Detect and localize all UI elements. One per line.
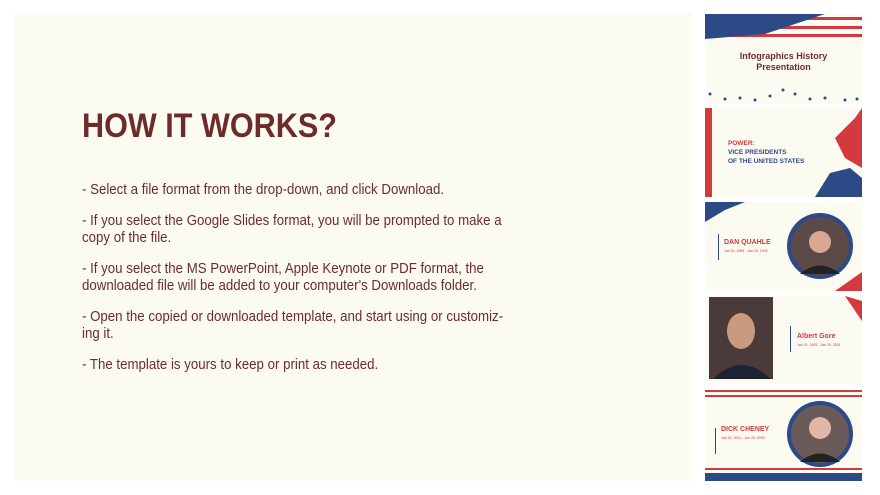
thumbnail title: Infographics History bbox=[740, 51, 827, 61]
name: DAN QUAHLE bbox=[724, 239, 771, 246]
instructions text: - If you select the Google Slides format, you will be prompted to make a copy of the file. bbox=[82, 213, 502, 246]
thumbnail 1: title slide bbox=[705, 14, 862, 104]
instructions text: - If you select the MS PowerPoint, Apple Keynote or PDF format, the downloaded file will be added to your computer's Downloads folder. bbox=[82, 261, 484, 294]
thumbnail 2 text: POWER: bbox=[728, 140, 755, 147]
instructions text: - Select a file format from the drop-down, and click Download. bbox=[82, 182, 444, 198]
thumbnail 5: Dick Cheney: DICK CHENEY bbox=[721, 426, 769, 433]
thumbnail 4: Albert Gore: Jan 20, 1993 - Jan 20, 2001 bbox=[797, 343, 841, 347]
main panel bbox=[15, 13, 691, 481]
thumbnail 5: Dick Cheney: Jan 20, 2001 - Jan 20, 2009 bbox=[721, 436, 765, 440]
title: HOW IT WORKS? bbox=[82, 107, 337, 145]
thumbnail 2: vice presidents bbox=[705, 108, 862, 197]
instructions text bbox=[82, 182, 503, 373]
instructions text: - Open the copied or downloaded template, and start using or customiz-ing it. bbox=[82, 309, 503, 342]
thumbnail 4: Albert Gore: Albert Gore bbox=[797, 333, 836, 340]
thumbnail title bbox=[740, 51, 828, 72]
thumbnail 2 text bbox=[728, 140, 804, 165]
thumbnail 2 text: OF THE UNITED STATES bbox=[728, 158, 804, 165]
thumbnail 5: Dick Cheney bbox=[705, 390, 862, 481]
instructions text: - The template is yours to keep or print as needed. bbox=[82, 357, 378, 373]
thumbnail 2 text: VICE PRESIDENTS bbox=[728, 149, 787, 156]
thumbnail 4: Albert Gore bbox=[705, 296, 862, 385]
thumbnail title: Presentation bbox=[756, 62, 811, 72]
thumbnail 3: Dan Quayle: Jan 20, 1989 - Jan 20, 1993 bbox=[724, 249, 768, 253]
thumbnail 3: Dan Quayle bbox=[705, 202, 862, 291]
